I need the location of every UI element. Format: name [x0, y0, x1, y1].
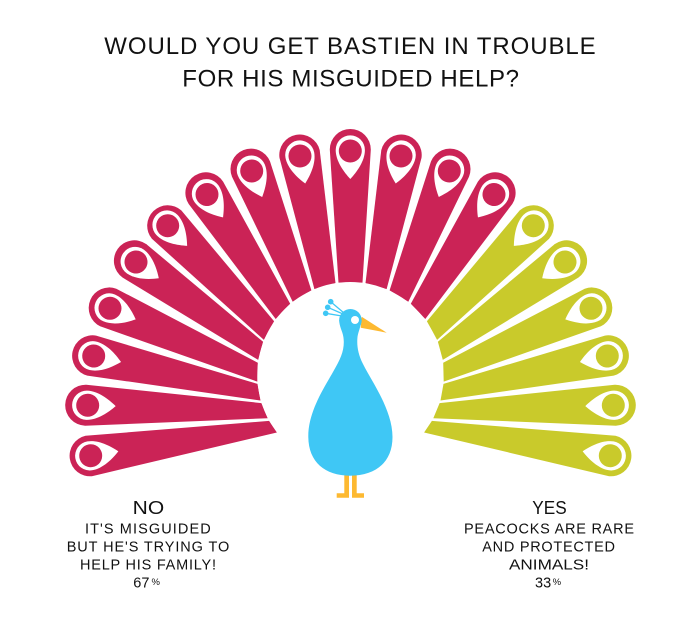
- label: no: [67, 498, 229, 591]
- feather 18: [433, 385, 636, 426]
- white centre circle: [257, 282, 443, 468]
- crest: [323, 299, 344, 316]
- title: WOULD YOU GET BASTIEN IN TROUBLE: [104, 33, 596, 60]
- label: yes: [464, 498, 634, 591]
- fan: no feathers (67%): [65, 129, 516, 476]
- feather 12: [390, 149, 471, 302]
- feather 14: [427, 204, 555, 340]
- label: yes: ANIMALS!: [509, 557, 589, 573]
- label: yes: PEACOCKS ARE RARE: [464, 521, 634, 537]
- label: no: %: [151, 577, 160, 588]
- fan: yes feathers (33%): [424, 204, 636, 476]
- label: no: 67: [133, 575, 149, 591]
- feather 8: [230, 149, 311, 302]
- feather 17: [440, 335, 629, 400]
- legs: [337, 475, 364, 498]
- label: yes: %: [553, 577, 562, 588]
- label: no: BUT HE'S TRYING TO: [67, 540, 229, 556]
- feather 5: [114, 240, 263, 360]
- feather 10: [330, 129, 371, 283]
- label: no: HELP HIS FAMILY!: [80, 557, 216, 573]
- feather 3: [72, 335, 260, 400]
- feather 6: [146, 204, 274, 340]
- beak: [361, 317, 387, 333]
- feather 11: [366, 134, 422, 289]
- feather 4: [89, 287, 258, 382]
- title: [104, 33, 596, 93]
- feather 16: [443, 287, 612, 382]
- feather 2: [65, 385, 268, 426]
- title: FOR HIS MISGUIDED HELP?: [182, 66, 519, 93]
- feather 19: [424, 421, 631, 476]
- label: no: NO: [133, 498, 164, 518]
- feather 7: [185, 172, 290, 319]
- label: yes: YES: [532, 498, 567, 518]
- eye: [351, 316, 359, 324]
- peacock: [308, 299, 392, 498]
- feather 1: [70, 421, 277, 476]
- label: yes: AND PROTECTED: [482, 540, 615, 556]
- label: no: IT'S MISGUIDED: [85, 521, 211, 537]
- feather 13: [411, 172, 516, 319]
- label: yes: 33: [535, 575, 551, 591]
- feather 9: [279, 134, 336, 289]
- feather 15: [438, 240, 587, 360]
- head: [339, 309, 362, 332]
- body: [308, 323, 392, 476]
